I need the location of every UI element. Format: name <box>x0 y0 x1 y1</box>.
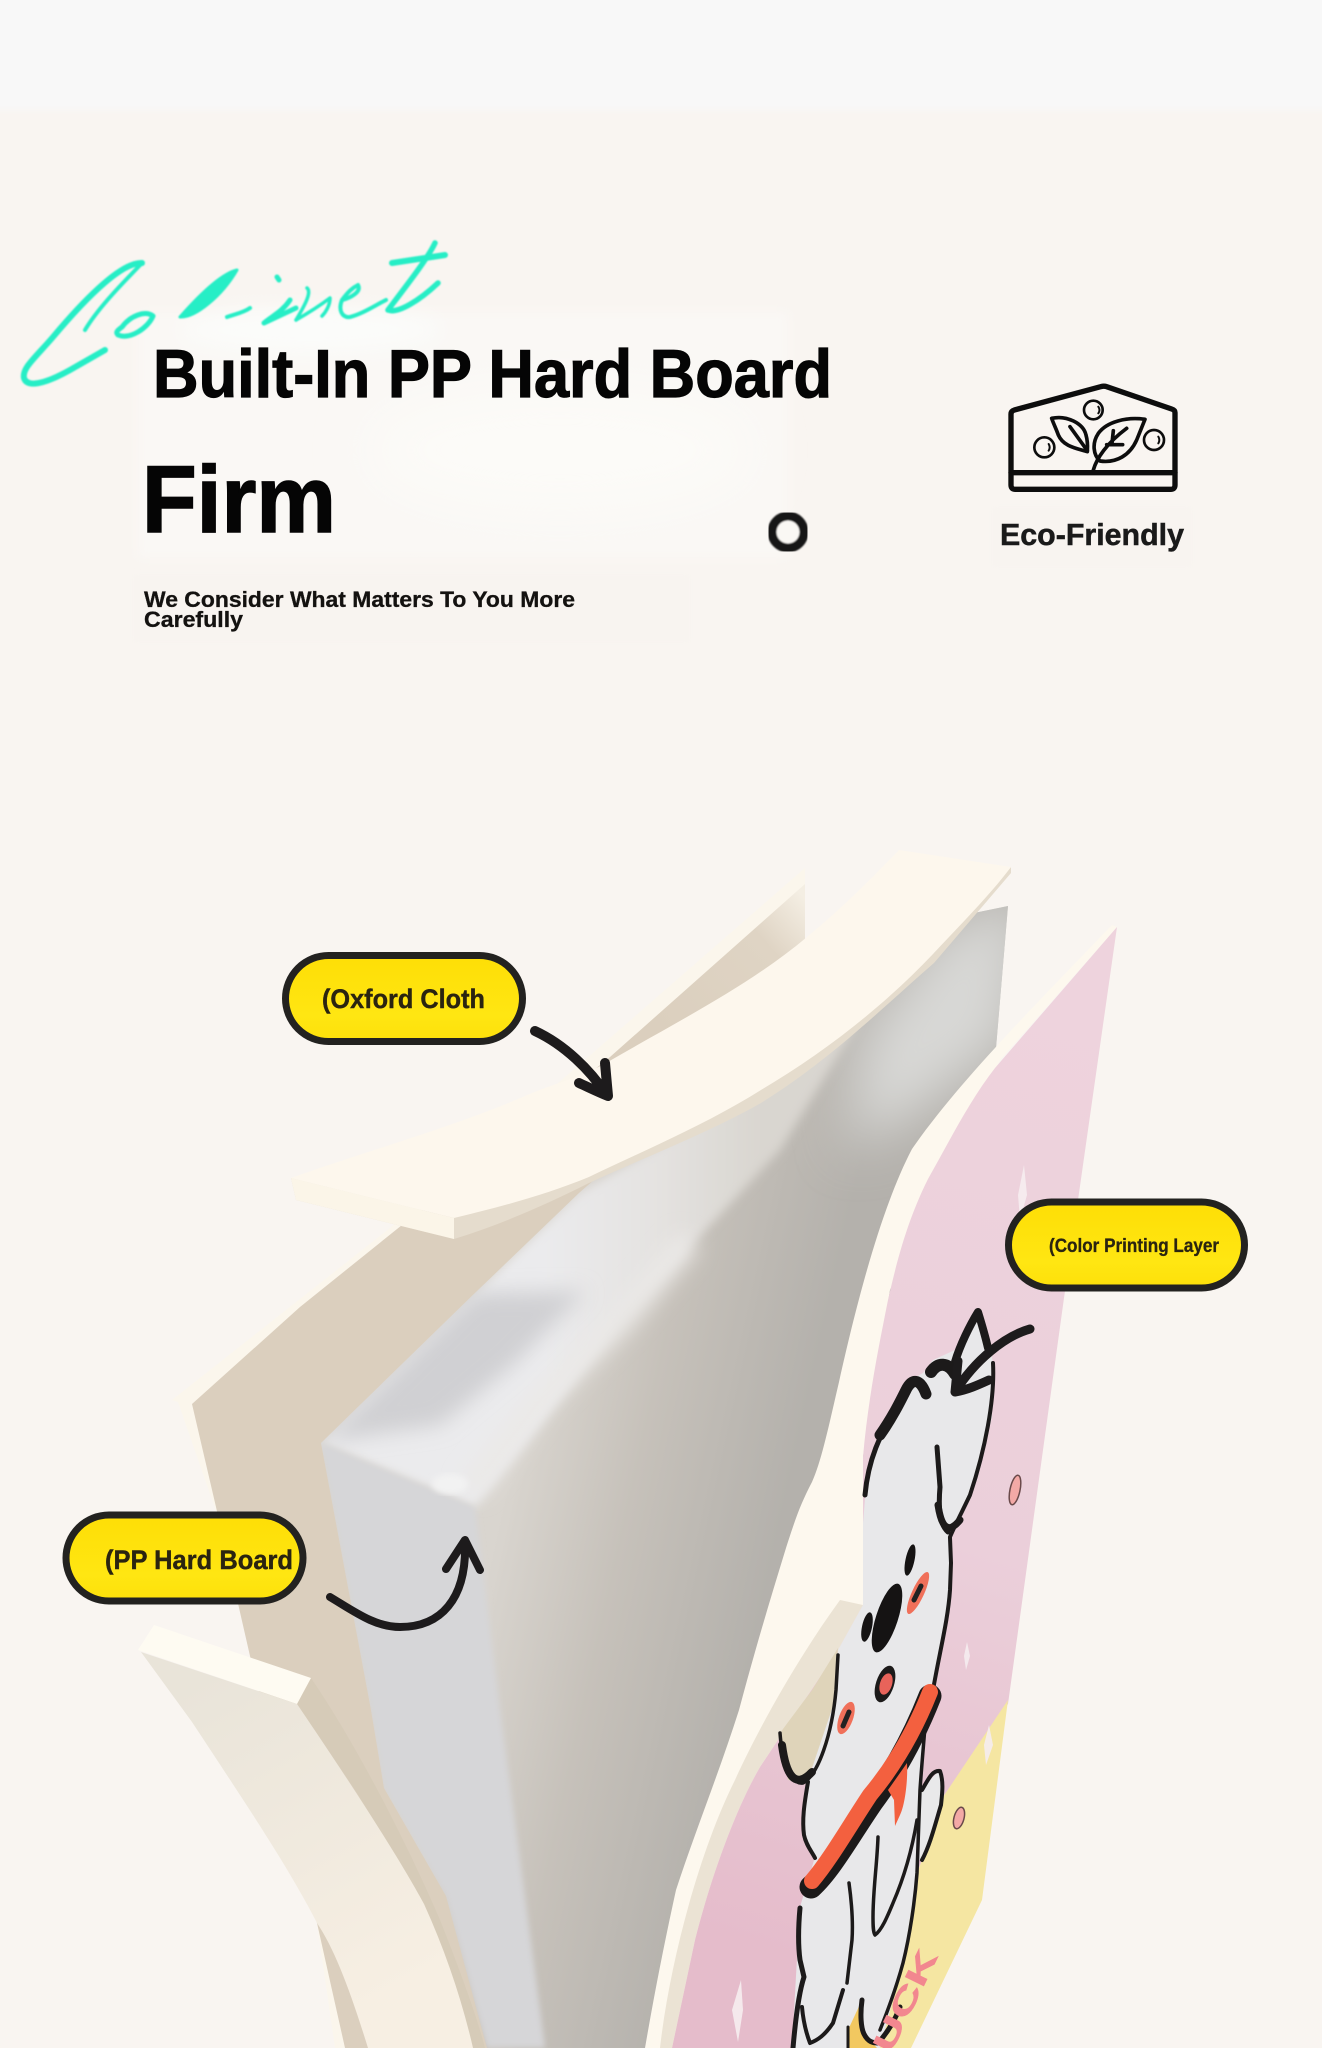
yellow print corner <box>851 1700 1008 2048</box>
soft panel behind title <box>138 308 788 558</box>
ring decoration <box>772 516 804 548</box>
dog illustration <box>732 1165 1027 2048</box>
subtitle: Carefully <box>144 607 244 632</box>
bottom left board strip <box>138 1625 485 2048</box>
arrow: to PP Hard Board <box>330 1540 480 1627</box>
sparkles <box>732 1165 1027 2042</box>
back panel <box>172 868 900 2048</box>
dog outlines <box>780 1312 993 2048</box>
subtitle: We Consider What Matters To You More <box>144 587 575 612</box>
top band <box>0 0 1322 110</box>
script word: Cabinet <box>24 243 445 384</box>
product: exploded cabinet board layers <box>138 850 1117 2048</box>
callout: PP Hard Board: (PP Hard Board <box>105 1545 293 1575</box>
label: Eco-Friendly: Eco-Friendly <box>1000 517 1185 552</box>
callout: Oxford Cloth: (Oxford Cloth <box>322 984 485 1014</box>
dog leg shadow <box>848 2000 877 2048</box>
dog left ear <box>780 1648 838 1783</box>
arrow: to Oxford Cloth <box>535 1031 608 1096</box>
arrow: to Color Printing Layer <box>955 1329 1030 1392</box>
dog body <box>792 1310 993 2048</box>
dog face <box>834 1543 933 1736</box>
heading: Firm: Firm <box>142 447 336 553</box>
dog scarf <box>812 1692 930 1881</box>
front board shaded side <box>660 1600 863 2048</box>
grey foam block <box>300 890 1030 2048</box>
petals <box>951 1474 1023 1830</box>
soft panel behind subtitle <box>133 575 690 642</box>
callout: Color Printing Layer: (Color Printing Layer <box>1049 1236 1220 1257</box>
callout: Oxford Cloth <box>286 956 522 1042</box>
dog hand <box>915 1770 942 1860</box>
callout: PP Hard Board <box>66 1515 303 1601</box>
subtitle <box>144 587 575 632</box>
title: Built-In PP Hard Board: Built-In PP Hard Board <box>153 336 832 412</box>
icon: eco-friendly house with leaves <box>1011 386 1175 489</box>
soft panel behind Eco-Friendly <box>992 507 1192 567</box>
top board strip <box>291 850 1011 1239</box>
callout: Color Printing Layer <box>1008 1202 1244 1288</box>
front board edge <box>645 925 1117 2048</box>
front board pink print <box>672 927 1117 2048</box>
